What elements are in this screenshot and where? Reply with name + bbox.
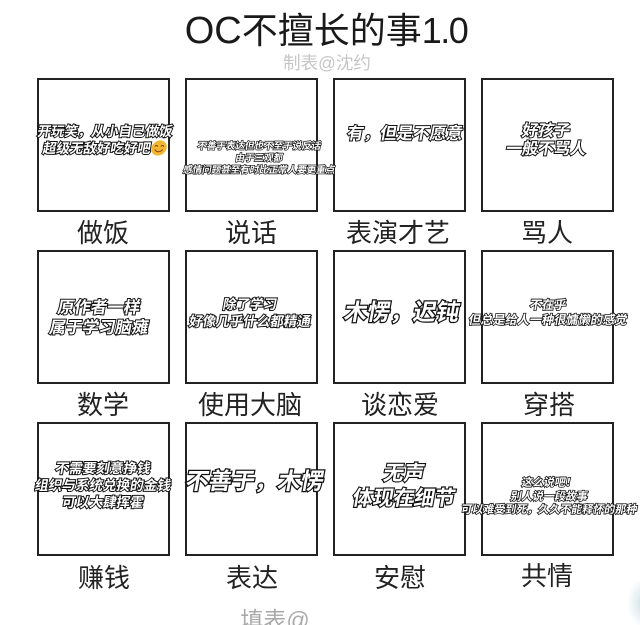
label: 做饭 (77, 218, 129, 248)
label: 安慰 (374, 563, 426, 593)
note: 组织与系统兑换的金钱 (34, 478, 172, 493)
frame (37, 250, 170, 384)
panel: 表演才艺 (333, 78, 466, 248)
maker credit: 制表@沈约 (283, 53, 371, 73)
corner smudge (628, 578, 640, 625)
note: 不在乎 (529, 298, 568, 312)
note: 可以大肆挥霍 (61, 495, 145, 510)
panel: 说话 (182, 78, 336, 248)
frame (333, 78, 466, 212)
label: 骂人 (521, 218, 573, 248)
note: 别人说一段故事 (510, 490, 589, 502)
note: 除了学习 (222, 297, 278, 312)
frame (333, 422, 466, 556)
frame (37, 78, 170, 212)
note (34, 460, 172, 510)
note: 有，但是不愿意 (346, 125, 464, 143)
label: 赚钱 (78, 563, 130, 593)
panel: 谈恋爱 (333, 250, 466, 420)
note (36, 123, 174, 156)
note (460, 476, 638, 516)
frame (37, 422, 170, 556)
panel: 赚钱 (34, 422, 172, 593)
note: 一般不骂人 (505, 141, 588, 158)
note: 感情问题甚至有时比正常人要更重点 (182, 165, 336, 176)
title: OC不擅长的事1.0 (185, 10, 467, 52)
note: 但总是给人一种很慵懒的感觉 (468, 313, 629, 327)
note: 原作者一样 (56, 299, 142, 317)
frame (481, 78, 614, 212)
note: 不需要刻意挣钱 (54, 461, 152, 476)
panel: 骂人 (481, 78, 614, 248)
panel: 数学 (37, 250, 170, 420)
note (47, 298, 150, 337)
note (187, 296, 312, 329)
note: 超级无敌好吃好吧 (42, 140, 152, 156)
note (468, 298, 629, 327)
note: 体现在细节 (351, 487, 457, 510)
label: 使用大脑 (198, 390, 302, 420)
label: 数学 (77, 390, 129, 420)
frame (185, 250, 318, 384)
note: 好像几乎什么都精通 (188, 314, 312, 329)
panel: 表达 (184, 422, 326, 593)
note (351, 461, 458, 510)
note: 无声 (381, 462, 427, 485)
panel: 使用大脑 (185, 250, 318, 420)
label: 共情 (521, 561, 573, 591)
note: 开玩笑，从小自己做饭 (36, 124, 174, 139)
frame (481, 422, 614, 556)
label: 穿搭 (523, 390, 575, 420)
note: 不善于，木愣 (184, 468, 326, 494)
note: 由于三观都 (234, 153, 284, 164)
note: 不善于表达但也不至于说反话 (196, 141, 322, 152)
panel: 穿搭 (468, 250, 629, 420)
panel: 安慰 (333, 422, 466, 593)
label: 表演才艺 (346, 218, 450, 248)
note: 可以难受到死，久久不能释怀的那种 (460, 504, 638, 516)
panel: 共情 (460, 422, 638, 591)
note: 这么说吧！ (521, 477, 578, 489)
frame (185, 78, 318, 212)
note (182, 140, 336, 176)
label: 说话 (225, 218, 277, 248)
frame (333, 250, 466, 384)
note: 属于学习脑瘫 (48, 319, 150, 337)
frame (185, 422, 318, 556)
note: 木愣，迟钝 (342, 299, 462, 325)
note: 好孩子 (521, 123, 572, 140)
label: 表达 (226, 563, 278, 593)
panel: 做饭 (36, 78, 174, 248)
label: 谈恋爱 (361, 390, 439, 420)
frame (481, 250, 614, 384)
note (505, 121, 588, 158)
